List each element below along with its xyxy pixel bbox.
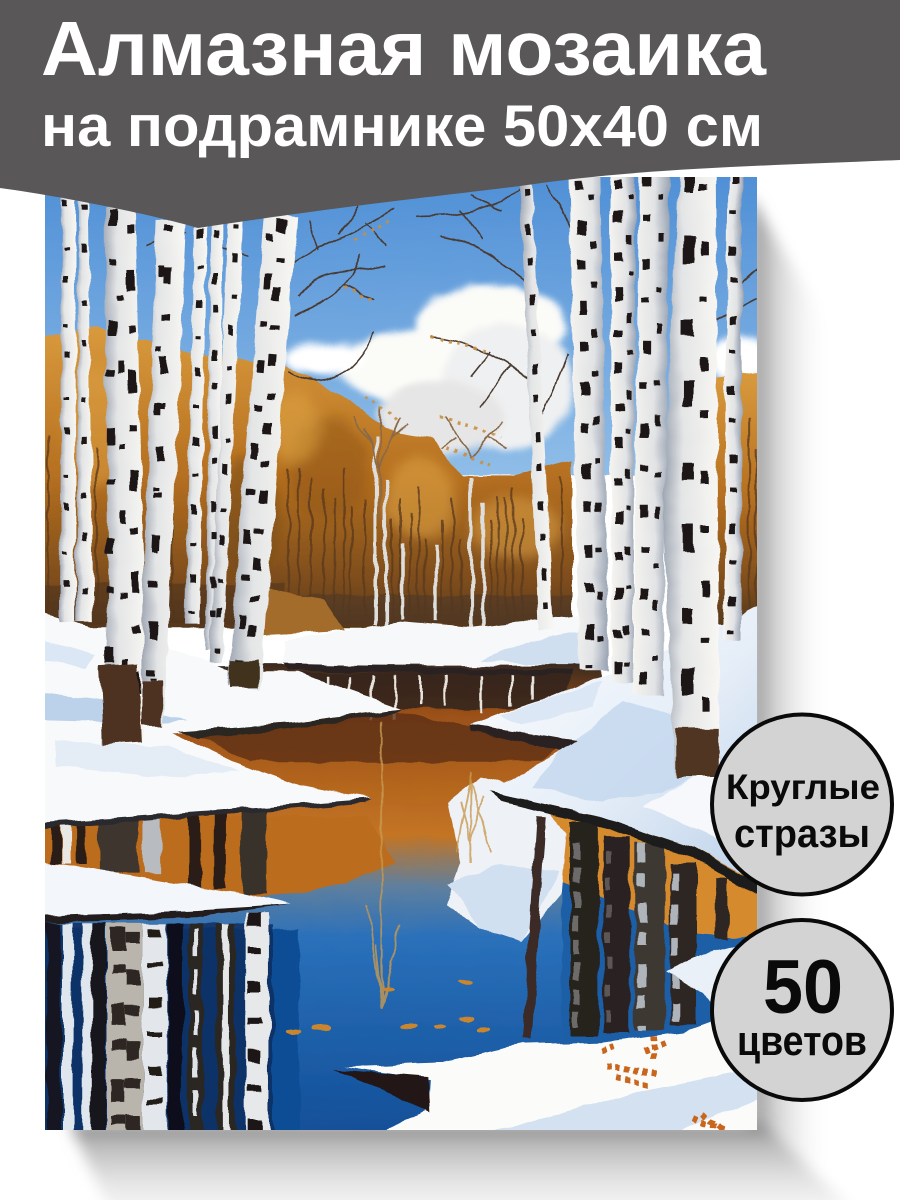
stream water (41, 665, 602, 1136)
right reflection of trunks (526, 817, 722, 1040)
back snow bank (284, 615, 592, 672)
title line one: Алмазная мозаика (41, 6, 767, 92)
bottom right snow bank (344, 1022, 757, 1130)
badge: round rhinestones: Круглые (726, 768, 880, 807)
small right snow bank (666, 946, 736, 1004)
orange forest reflection (45, 829, 396, 897)
thin reflected trees (368, 721, 491, 1009)
title line two: на подрамнике 50х40 см (41, 94, 763, 159)
bare branches and twigs (147, 184, 761, 518)
badge: 50 colours: цветов (737, 1017, 867, 1064)
right snow bank (469, 604, 761, 883)
far orange forest (41, 326, 572, 628)
badge: 50 colours (712, 920, 892, 1100)
clouds (284, 286, 769, 454)
cloud reflection (446, 776, 567, 941)
forest trunks and undergrowth (48, 417, 756, 625)
left mid snow strip (41, 862, 292, 919)
title banner (0, 0, 900, 228)
fallen leaves on water (286, 979, 490, 1033)
badge: 50 colours: 50 (763, 945, 843, 1030)
forest colour mottling (66, 367, 562, 579)
sky (41, 171, 761, 475)
canvas drop shadow (70, 195, 860, 1200)
left reflection of trunks (41, 810, 273, 1136)
badge: round rhinestones: стразы (734, 812, 870, 856)
autumn leaves on branches (344, 220, 501, 468)
left snow bank (41, 612, 402, 824)
painting: birch forest with reflecting stream (41, 171, 769, 1136)
back bank shadow line (284, 663, 572, 675)
birch trunks (60, 171, 742, 776)
birch bark marks (66, 174, 734, 776)
badge: round rhinestones (712, 714, 892, 894)
autumn leaves on snow (602, 1037, 726, 1132)
